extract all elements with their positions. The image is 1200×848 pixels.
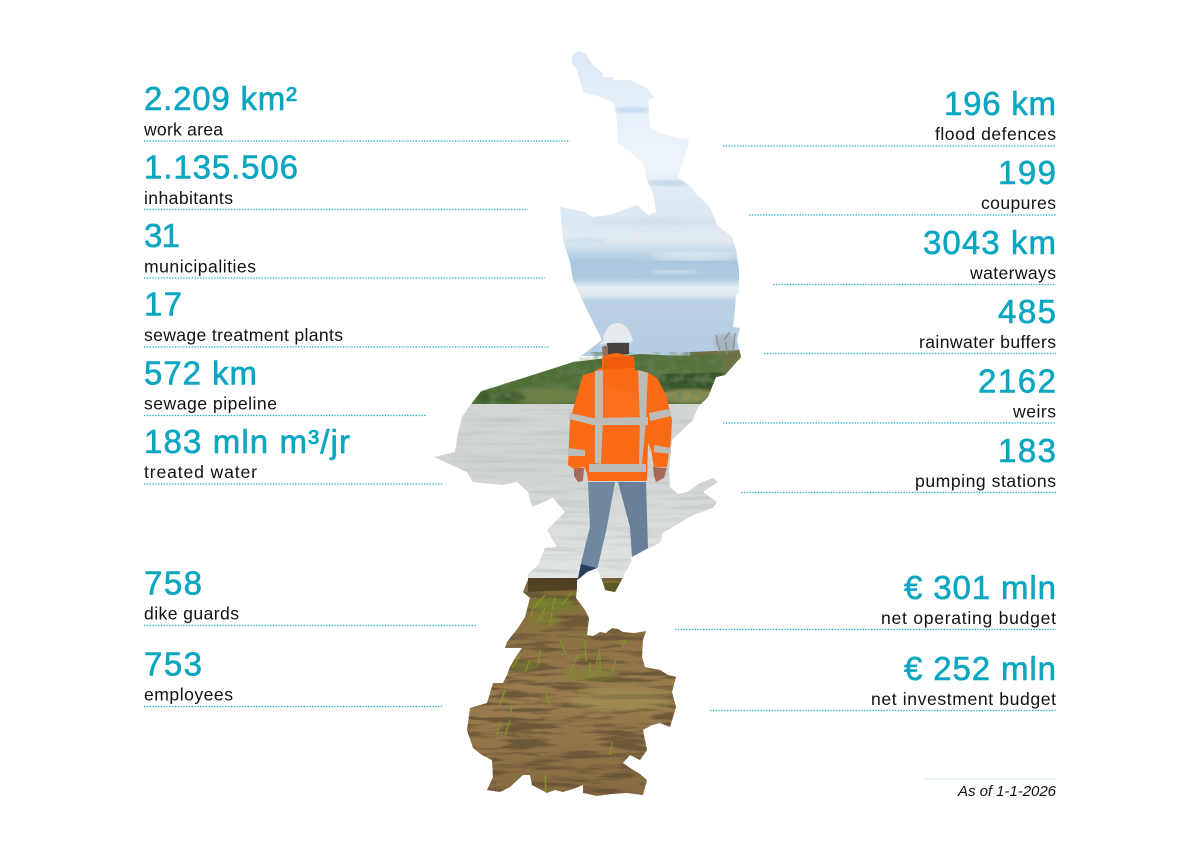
stat: coupures (749, 154, 1056, 215)
map-shaped photo of a worker on the riverbank (434, 51, 745, 797)
stat: inhabitants (144, 148, 528, 210)
footnote: reference date: As of 1-1-2026 (957, 783, 1057, 800)
photo: sky with clouds (560, 51, 741, 356)
stat: weirs (723, 362, 1056, 423)
stat: flood defences: flood defences (935, 124, 1056, 144)
grass blades (497, 592, 625, 795)
stat: dike guards: 758 (144, 564, 202, 602)
worker jacket (568, 353, 672, 481)
photo: muddy ground with grass (465, 578, 680, 797)
stat: rainwater buffers: rainwater buffers (919, 332, 1056, 352)
stat: flood defences (723, 85, 1056, 146)
stat: sewage treatment plants (144, 286, 549, 347)
stat: rainwater buffers: 485 (998, 293, 1056, 330)
worker head and hair (602, 343, 629, 358)
left stats: people (144, 564, 477, 706)
photo: river water (434, 404, 741, 584)
stat: waterways: 3043 km (923, 224, 1056, 261)
worker white helmet (599, 323, 633, 345)
stat: weirs: 2162 (978, 362, 1056, 400)
stat: dike guards (144, 564, 477, 626)
stat: employees: employees (144, 684, 233, 704)
stat: treated water: 183 mln m³/jr (144, 423, 350, 460)
stat: sewage treatment plants: sewage treatment plants (144, 325, 343, 345)
stat: treated water (144, 423, 443, 484)
stat: flood defences: 196 km (944, 85, 1056, 122)
stat: net investment budget (710, 650, 1056, 710)
stat: waterways: waterways (969, 263, 1056, 283)
stat: sewage pipeline: sewage pipeline (144, 394, 277, 414)
stat: weirs: weirs (1012, 402, 1056, 422)
worker reflective strips (568, 370, 671, 472)
stat: net operating budget: € 301 mln (904, 569, 1056, 606)
stat: net operating budget: net operating budget (881, 608, 1056, 628)
stat: pumping stations: 183 (998, 432, 1056, 469)
stat: net investment budget: net investment budget (871, 689, 1056, 709)
stat: work area (143, 80, 570, 141)
stat: waterways (773, 224, 1056, 284)
stat: work area: 2.209 km² (144, 80, 297, 117)
stat: sewage pipeline: 572 km (144, 354, 257, 392)
stat: net investment budget: € 252 mln (904, 650, 1056, 687)
stat: dike guards: dike guards (144, 604, 239, 624)
right stats: budget (675, 569, 1056, 710)
right stats: water infrastructure (723, 85, 1056, 492)
stat: municipalities: municipalities (144, 256, 256, 276)
stat: coupures: 199 (998, 154, 1056, 191)
stat: treated water: treated water (144, 462, 257, 482)
stat: work area: work area (143, 120, 223, 140)
stat: sewage treatment plants: 17 (144, 286, 182, 322)
footnote: reference date (924, 779, 1057, 800)
worker jeans (580, 482, 615, 570)
stat: net operating budget (675, 569, 1056, 630)
stat: pumping stations (741, 432, 1056, 492)
photo: distant tree line (460, 332, 745, 410)
stat: inhabitants: inhabitants (144, 188, 233, 208)
photo: worker in orange high-visibility jacket (568, 323, 672, 578)
stat: municipalities: 31 (144, 217, 180, 254)
stat: employees (144, 646, 443, 706)
stat: employees: 753 (144, 646, 202, 682)
stat: rainwater buffers (764, 293, 1056, 354)
stat: pumping stations: pumping stations (915, 471, 1056, 491)
stat: inhabitants: 1.135.506 (144, 148, 298, 186)
stat: coupures: coupures (981, 193, 1056, 213)
stat: sewage pipeline (144, 354, 427, 416)
stat: municipalities (144, 217, 545, 278)
worker hands (574, 468, 584, 482)
left stats: organisation and assets (143, 80, 570, 484)
